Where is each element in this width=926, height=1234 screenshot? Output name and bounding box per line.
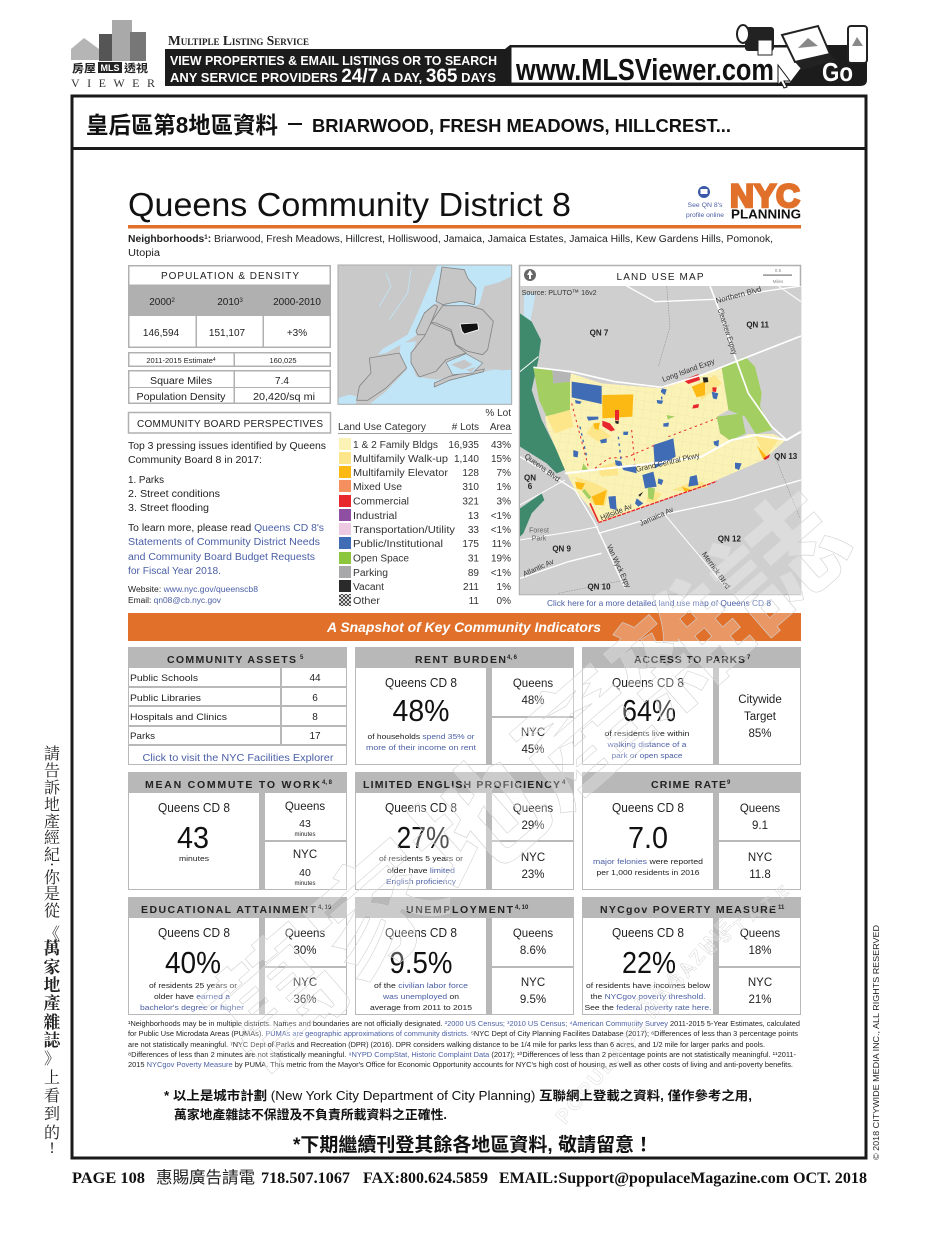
- neighborhoods text: 1: [204, 235, 208, 241]
- side note vertical text: 上: [44, 1069, 60, 1087]
- panel: unemployment: NYC: [521, 977, 545, 989]
- footnotes: are not statistically meaningful. ⁷NYC Dept of Parks and Recreation (DPR) (2016). DPR considers walking distance to be 1/4 mile for parks less than 6 acres, and 1/2 mile for larger parks and pools.: [128, 1042, 765, 1049]
- panel: nycgov poverty measure: of residents have incomes below: [586, 981, 711, 990]
- side note vertical text: 是: [44, 885, 60, 903]
- footnotes: [128, 1021, 800, 1069]
- profile link: See QN 8's: [688, 202, 723, 209]
- header logo: MLS Viewer: 房屋: [72, 61, 96, 75]
- land use legend table: 175: [462, 539, 479, 550]
- panel: crime rate: 11.8: [749, 869, 771, 881]
- side note vertical text: 》: [44, 1051, 60, 1068]
- land use legend table: 33: [468, 525, 479, 536]
- section heading: 皇后區第8地區資料: [86, 112, 278, 138]
- map labels: QN 9: [552, 544, 572, 553]
- panel: limited english proficiency: LIMITED ENGLISH PROFICIENCY: [363, 779, 560, 791]
- disclaimer note: * 以上是城市計劃 (New York City Department of City Planning) 互聯網上登載之資料, 僅作參考之用,: [164, 1088, 752, 1103]
- map labels: QN 7: [590, 328, 609, 337]
- header logo: MLS Viewer: MLS: [100, 63, 120, 73]
- panel: educational attainment: 30%: [293, 945, 317, 957]
- panel: population and density: 2000-2010: [273, 297, 321, 308]
- footnotes: ⁸Differences of less than 2 minutes are not statistically meaningful. ⁹NYPD CompStat, Historic Complaint Data (2017); ¹⁰Differences of less than 2 percentage points are not statistically meaningful. ¹¹2011-: [128, 1051, 797, 1059]
- land use legend table: 11: [469, 596, 479, 607]
- panel: crime rate: Queens CD 8: [612, 801, 684, 815]
- footnotes: for Public Use Microdata Areas (PUMAs). PUMAs are geographic approximations of community districts. ⁵NYC Dept of City Planning Facilites Database (2017); ⁶Differences of less than 3 percentage points: [128, 1031, 799, 1038]
- land use legend table: 13: [468, 511, 479, 522]
- map labels: QN 12: [718, 534, 741, 543]
- panel: rent burden: of households spend 35% or: [368, 732, 475, 741]
- land use legend table: 43%: [491, 440, 511, 451]
- panel: population and density: 2000: [149, 297, 171, 308]
- panel: limited english proficiency: 29%: [521, 820, 545, 832]
- panel: community assets: Public Schools: [130, 673, 198, 684]
- copyright vertical text: © 2018 CITYWIDE MEDIA INC., ALL RIGHTS RESERVED: [871, 925, 881, 1160]
- panel: community board perspectives: Email: qn08@cb.nyc.gov: [128, 596, 221, 605]
- panel: unemployment: UNEMPLOYMENT: [406, 904, 514, 916]
- map labels: QN 10: [587, 582, 611, 591]
- area and density table: Population Density: [136, 392, 226, 403]
- profile link: profile online: [686, 212, 724, 219]
- panel: unemployment: 9.5%: [520, 994, 546, 1006]
- logo: NYC Planning: NYC: [730, 178, 800, 214]
- logo: NYC Planning: PLANNING: [731, 206, 801, 222]
- side note vertical text: 萬: [44, 938, 60, 958]
- panel: community assets: Parks: [130, 731, 155, 742]
- header banner: MLS service and website: www.MLSViewer.com: [515, 52, 774, 87]
- land use legend table: Parking: [353, 568, 388, 579]
- panel: unemployment: Queens: [513, 928, 553, 940]
- panel: nycgov poverty measure: 21%: [748, 994, 772, 1006]
- side note vertical text: 產: [44, 813, 60, 831]
- panel: rent burden: 48%: [521, 695, 545, 707]
- panel: access to parks: 64%: [622, 693, 676, 728]
- panel: community board perspectives: 1. Parks: [128, 475, 164, 486]
- land use legend table: <1%: [491, 525, 511, 536]
- footnotes: ¹Neighborhoods may be in multiple districts. Names and boundaries are not officially designated. ²2000 US Census; ³2010 US Census; ⁴American Community Survey 2011-2015 5-Year Estimates, calculated: [128, 1021, 800, 1028]
- panel: community assets: Hospitals and Clinics: [130, 712, 227, 723]
- panel: rent burden: 4, 6: [507, 655, 518, 661]
- document title: Queens Community District 8: [128, 186, 571, 223]
- icon: video camera: [737, 25, 774, 55]
- panel: community board perspectives: and Community Board Budget Requests: [128, 552, 315, 563]
- map labels: Grand Central Pkwy: [635, 451, 701, 474]
- map labels: Atlantic Av: [521, 557, 555, 578]
- panel: mean commute to work: 40: [299, 867, 311, 879]
- land use map panel: [520, 266, 801, 594]
- footer line: EMAIL:Support@populaceMagazine.com: [499, 1170, 790, 1187]
- panel: population and density: 3: [239, 298, 243, 304]
- area and density table: 20,420/sq mi: [253, 392, 315, 403]
- neighborhoods text: [128, 234, 773, 259]
- panel: population and density: [128, 265, 331, 348]
- estimate row: 4: [213, 357, 216, 363]
- panel: rent burden: 45%: [521, 744, 545, 756]
- panel: limited english proficiency: Queens CD 8: [385, 801, 457, 815]
- panel: community assets: 6: [312, 693, 318, 704]
- map labels: Merrick Blvd: [700, 550, 732, 591]
- panel: educational attainment: older have earned a: [154, 992, 231, 1001]
- map labels: Park: [532, 536, 547, 543]
- panel: mean commute to work: [128, 772, 347, 890]
- panel: nycgov poverty measure: 18%: [748, 945, 772, 957]
- panel: crime rate: [582, 772, 801, 890]
- neighborhoods text: Neighborhoods: [128, 234, 205, 245]
- land use legend table: 15%: [491, 454, 511, 465]
- header banner: MLS service and website: ANY SERVICE PROVIDERS 24/7 A DAY, 365 DAYS: [170, 66, 496, 87]
- panel: educational attainment: 40%: [165, 945, 221, 980]
- footnotes: 2015 NYCgov Poverty Measure by PUMA. This metric from the Mayor's Office for Economic Opportunity accounts for NYC's high cost of housing, as well as other costs of living and anti-poverty benefits.: [128, 1062, 793, 1069]
- profile link: [686, 186, 724, 219]
- panel: mean commute to work: 4, 8: [322, 780, 333, 786]
- panel: community board perspectives: 3. Street flooding: [128, 503, 209, 514]
- side note vertical text: 產: [44, 993, 60, 1013]
- disclaimer note: [164, 1088, 752, 1122]
- panel: educational attainment: Queens CD 8: [158, 926, 230, 940]
- header banner: MLS service and website: Go: [822, 57, 853, 87]
- side note vertical text: 《: [44, 926, 60, 943]
- panel: community assets: Click to visit the NYC Facilities Explorer: [142, 753, 334, 764]
- panel: access to parks: 85%: [748, 728, 772, 740]
- panel: crime rate: 9: [727, 780, 731, 786]
- panel: unemployment: 8.6%: [520, 945, 546, 957]
- land use legend table: % Lot: [485, 408, 511, 419]
- panel: nycgov poverty measure: See the federal poverty rate here.: [584, 1003, 712, 1012]
- land use legend table: # Lots: [452, 422, 479, 433]
- area and density table: 7.4: [275, 376, 289, 387]
- estimate row: 2011-2015 Estimate: [146, 356, 213, 365]
- panel: nycgov poverty measure: 11: [778, 905, 785, 911]
- map labels: QN: [524, 474, 536, 483]
- panel: community assets: COMMUNITY ASSETS: [167, 654, 296, 666]
- panel: access to parks: 7: [747, 655, 751, 661]
- panel: community board perspectives: Community Board 8 in 2017:: [128, 455, 262, 466]
- panel: rent burden: NYC: [521, 727, 545, 739]
- panel: nycgov poverty measure: NYC: [748, 977, 772, 989]
- panel: educational attainment: EDUCATIONAL ATTAINMENT: [141, 904, 317, 916]
- land use legend table: Open Space: [353, 554, 409, 564]
- land use legend table: Land Use Category: [338, 422, 426, 433]
- section heading: [86, 112, 731, 138]
- panel: community assets: 5: [300, 655, 304, 661]
- map title bar: 0.5: [775, 268, 782, 273]
- land use legend table: 1 & 2 Family Bldgs: [353, 440, 438, 451]
- panel: nycgov poverty measure: [582, 897, 801, 1015]
- panel: crime rate: per 1,000 residents in 2016: [596, 868, 700, 877]
- side note vertical text: :: [50, 858, 54, 875]
- map labels: [521, 284, 798, 591]
- panel: community board perspectives: To learn more, please read Queens CD 8's: [128, 523, 324, 534]
- land use legend table: 16,935: [448, 440, 479, 451]
- side note vertical text: 的: [44, 1124, 60, 1142]
- area and density table: Square Miles: [150, 376, 212, 387]
- header logo: MLS Viewer: VIEWER: [71, 76, 155, 90]
- panel: educational attainment: bachelor's degree or higher: [140, 1003, 245, 1012]
- panel: access to parks: Queens CD 8: [612, 676, 684, 690]
- panel: nycgov poverty measure: Queens: [740, 928, 780, 940]
- panel: community board perspectives: 2. Street conditions: [128, 489, 220, 500]
- panel: mean commute to work: minutes: [294, 881, 316, 887]
- map labels: Queens Blvd: [523, 452, 562, 483]
- panel: population and density: +3%: [287, 328, 307, 339]
- map labels: QN 11: [746, 320, 770, 329]
- watermark: POPULACE MAGAZINE: [552, 915, 736, 1128]
- side note vertical text: 從: [44, 902, 61, 920]
- panel: unemployment: was unemployed on: [382, 992, 459, 1001]
- panel: limited english proficiency: 4: [562, 780, 566, 786]
- estimate row: [128, 352, 331, 367]
- land use map caption link: Click here for a more detailed land use map of Queens CD 8: [547, 598, 771, 608]
- land use legend table: 211: [463, 582, 479, 593]
- panel: community board perspectives: Website: www.nyc.gov/queenscb8: [128, 585, 258, 594]
- panel: mean commute to work: minutes: [179, 854, 209, 863]
- panel: limited english proficiency: [355, 772, 574, 890]
- section heading: BRIARWOOD, FRESH MEADOWS, HILLCREST...: [312, 116, 731, 136]
- panel: rent burden: more of their income on rent: [366, 743, 477, 752]
- panel: community assets: Public Libraries: [130, 693, 201, 704]
- side note vertical text: 請: [44, 745, 60, 763]
- panel: access to parks: ACCESS TO PARKS: [634, 654, 745, 666]
- land use legend table: 31: [468, 554, 479, 564]
- footer line: 718.507.1067: [261, 1170, 350, 1187]
- land use legend table: Mixed Use: [353, 482, 402, 493]
- panel: educational attainment: 4, 10: [318, 905, 332, 911]
- map title bar: [524, 268, 792, 284]
- icon: cursor: [778, 65, 790, 88]
- panel: community assets: 17: [309, 731, 321, 742]
- map labels: Long Island Expy: [661, 357, 716, 384]
- panel: limited english proficiency: 27%: [396, 820, 450, 855]
- land use legend table: 7%: [497, 468, 511, 479]
- orange title rule: [128, 225, 801, 228]
- land use legend table: Industrial: [353, 511, 397, 522]
- panel: mean commute to work: 43: [177, 820, 209, 855]
- panel: access to parks: park or open space: [612, 751, 682, 760]
- side note vertical text: 看: [44, 1087, 60, 1105]
- panel: community board perspectives: Top 3 pressing issues identified by Queens: [128, 441, 326, 452]
- land use map: [520, 286, 801, 594]
- panel: community assets: 44: [309, 673, 321, 684]
- panel: unemployment: of the civilian labor force: [374, 981, 468, 990]
- panel: crime rate: 9.1: [752, 820, 768, 832]
- land use legend table: <1%: [491, 511, 511, 522]
- land use legend table: Multifamily Walk-up: [353, 454, 448, 465]
- land use legend table: 11%: [492, 539, 511, 550]
- header logo: MLS Viewer: 透視: [124, 61, 148, 75]
- panel: limited english proficiency: NYC: [521, 852, 545, 864]
- panel: access to parks: of residents live within: [604, 729, 690, 738]
- land use legend table: <1%: [491, 568, 511, 579]
- panel: educational attainment: NYC: [293, 977, 317, 989]
- panel: nycgov poverty measure: Queens CD 8: [612, 926, 684, 940]
- panel: population and density: 146,594: [143, 328, 180, 339]
- land use legend table: Public/Institutional: [353, 539, 443, 550]
- panel: population and density: 2010: [217, 297, 239, 308]
- panel: mean commute to work: Queens: [285, 801, 325, 813]
- land use legend table: 3%: [497, 496, 511, 508]
- map labels: Jamaica Av: [638, 505, 675, 528]
- land use legend table: 1%: [497, 582, 511, 593]
- neighborhoods text: Briarwood, Fresh Meadows, Hillcrest, Holliswood, Jamaica, Jamaica Estates, Jamaica Hills, Kew Gardens Hills, Pomonok,: [214, 234, 755, 245]
- locator map of New York City: [338, 264, 512, 405]
- land use legend table: 128: [462, 468, 479, 479]
- land use legend table: [338, 408, 512, 607]
- land use legend table: 89: [468, 568, 479, 579]
- side note vertical text: 經: [44, 829, 60, 847]
- panel: mean commute to work: MEAN COMMUTE TO WORK: [145, 779, 320, 791]
- side note vertical text: 雜: [44, 1013, 60, 1032]
- land use legend table: Commercial: [353, 496, 409, 508]
- side note vertical text: [44, 745, 62, 1157]
- map title bar: Miles: [773, 279, 784, 284]
- map labels: Forest: [529, 528, 549, 535]
- panel: unemployment: Queens CD 8: [385, 926, 457, 940]
- footer line: PAGE 108: [72, 1170, 145, 1187]
- panel: nycgov poverty measure: NYCgov POVERTY MEASURE: [600, 904, 776, 916]
- panel: community assets: 8: [312, 712, 318, 723]
- side note vertical text: 訴: [44, 779, 61, 797]
- map labels: Northern Blvd: [715, 284, 762, 305]
- banner: key community indicators: [128, 613, 801, 641]
- panel: access to parks: [582, 647, 801, 765]
- panel: nycgov poverty measure: the NYCgov poverty threshold.: [590, 992, 706, 1001]
- map labels: Clearview Expwy: [716, 307, 739, 356]
- land use legend table: 310: [462, 482, 479, 493]
- panel: rent burden: 48%: [392, 693, 450, 728]
- panel: rent burden: [355, 647, 574, 765]
- page frame: [72, 96, 866, 1158]
- header logo: MLS Viewer: [71, 20, 155, 90]
- panel: limited english proficiency: Queens: [513, 803, 553, 815]
- panel: mean commute to work: NYC: [293, 849, 317, 861]
- panel: educational attainment: Queens: [285, 928, 325, 940]
- panel: unemployment: 9.5%: [390, 945, 452, 980]
- land use legend table: Multifamily Elevator: [353, 468, 449, 479]
- panel: crime rate: major felonies were reported: [593, 857, 703, 866]
- header banner: MLS service and website: [165, 25, 867, 88]
- panel: rent burden: Queens: [513, 678, 553, 690]
- footer line: FAX:800.624.5859: [363, 1170, 488, 1187]
- panel: access to parks: Citywide: [738, 694, 782, 706]
- map labels: 6: [528, 482, 533, 491]
- map labels: Source: PLUTO™ 16v2: [522, 288, 597, 297]
- panel: educational attainment: 36%: [293, 994, 317, 1006]
- footer line: 惠賜廣告請電: [156, 1168, 255, 1187]
- panel: community board perspectives: [128, 412, 330, 605]
- panel: community assets: [128, 647, 347, 765]
- side note vertical text: 紀: [44, 846, 60, 864]
- panel: unemployment: average from 2011 to 2015: [370, 1003, 472, 1012]
- panel: mean commute to work: Queens CD 8: [158, 801, 230, 815]
- banner: key community indicators: A Snapshot of Key Community Indicators: [326, 619, 601, 635]
- side note vertical text: 地: [44, 975, 60, 995]
- panel: population and density: 151,107: [209, 328, 246, 339]
- land use legend table: 19%: [491, 554, 511, 564]
- panel: access to parks: walking distance of a: [606, 740, 687, 749]
- land use legend table: Area: [490, 422, 511, 433]
- area and density table: [128, 370, 331, 404]
- icon: phone: [848, 26, 867, 63]
- panel: limited english proficiency: 23%: [521, 869, 545, 881]
- panel: limited english proficiency: of residents 5 years or: [379, 854, 464, 863]
- side note vertical text: 地: [44, 796, 60, 814]
- header banner: MLS service and website: VIEW PROPERTIES & EMAIL LISTINGS OR TO SEARCH: [170, 53, 497, 68]
- panel: rent burden: Queens CD 8: [385, 676, 457, 690]
- panel: unemployment: [355, 897, 574, 1015]
- land use legend table: Vacant: [353, 582, 384, 593]
- land use legend table: Other: [353, 596, 381, 607]
- panel: crime rate: CRIME RATE: [651, 779, 726, 791]
- land use legend table: Transportation/Utility: [353, 525, 455, 536]
- map labels: Van Wyck Expy: [605, 543, 633, 589]
- map labels: Hillside Av: [599, 502, 633, 523]
- panel: unemployment: 4, 10: [515, 905, 529, 911]
- panel: educational attainment: [128, 897, 347, 1015]
- side note vertical text: 誌: [44, 1031, 62, 1050]
- neighborhoods text: :: [208, 234, 211, 245]
- estimate row: 160,025: [269, 356, 297, 365]
- panel: population and density: POPULATION & DENSITY: [161, 271, 299, 282]
- land use legend table: 1%: [497, 482, 511, 493]
- panel: educational attainment: of residents 25 years or: [149, 981, 238, 990]
- watermark: REAL ESTATE: [632, 883, 792, 1013]
- land use legend table: 0%: [497, 596, 511, 607]
- panel: mean commute to work: 43: [299, 818, 311, 830]
- panel: access to parks: Target: [744, 711, 777, 723]
- land use legend table: 1,140: [454, 454, 479, 465]
- panel: community board perspectives: Statements of Community District Needs: [128, 537, 320, 548]
- panel: crime rate: 7.0: [628, 820, 668, 855]
- side note vertical text: 你: [44, 869, 61, 887]
- footer line: [72, 1168, 867, 1187]
- disclaimer note: 萬家地產雜誌不保證及不負責所載資料之正確性.: [174, 1107, 447, 1122]
- watermark: 萬家地產雜誌: [185, 470, 876, 1095]
- side note vertical text: !: [49, 1140, 55, 1157]
- panel: limited english proficiency: older have limited: [387, 866, 455, 875]
- continued notice: *下期繼續刊登其餘各地區資料, 敬請留意！: [293, 1133, 653, 1156]
- panel: mean commute to work: minutes: [294, 832, 316, 838]
- neighborhoods text: Utopia: [128, 248, 160, 259]
- panel: community board perspectives: COMMUNITY BOARD PERSPECTIVES: [137, 419, 323, 430]
- panel: crime rate: Queens: [740, 803, 780, 815]
- panel: limited english proficiency: English proficiency: [386, 877, 456, 886]
- map title bar: LAND USE MAP: [616, 272, 704, 283]
- panel: population and density: 2: [171, 298, 175, 304]
- panel: rent burden: RENT BURDEN: [415, 654, 506, 666]
- panel: nycgov poverty measure: 22%: [622, 945, 676, 980]
- side note vertical text: 家: [44, 957, 60, 977]
- panel: community board perspectives: for Fiscal Year 2018.: [128, 566, 221, 577]
- header banner: MLS service and website: Multiple Listing Service: [168, 33, 309, 48]
- land use legend table: 321: [462, 496, 479, 508]
- footer line: OCT. 2018: [793, 1170, 867, 1187]
- icon: laptop: [782, 26, 836, 70]
- panel: crime rate: NYC: [748, 852, 772, 864]
- side note vertical text: 到: [44, 1105, 60, 1123]
- map labels: QN 13: [774, 452, 798, 461]
- side note vertical text: 告: [44, 762, 60, 780]
